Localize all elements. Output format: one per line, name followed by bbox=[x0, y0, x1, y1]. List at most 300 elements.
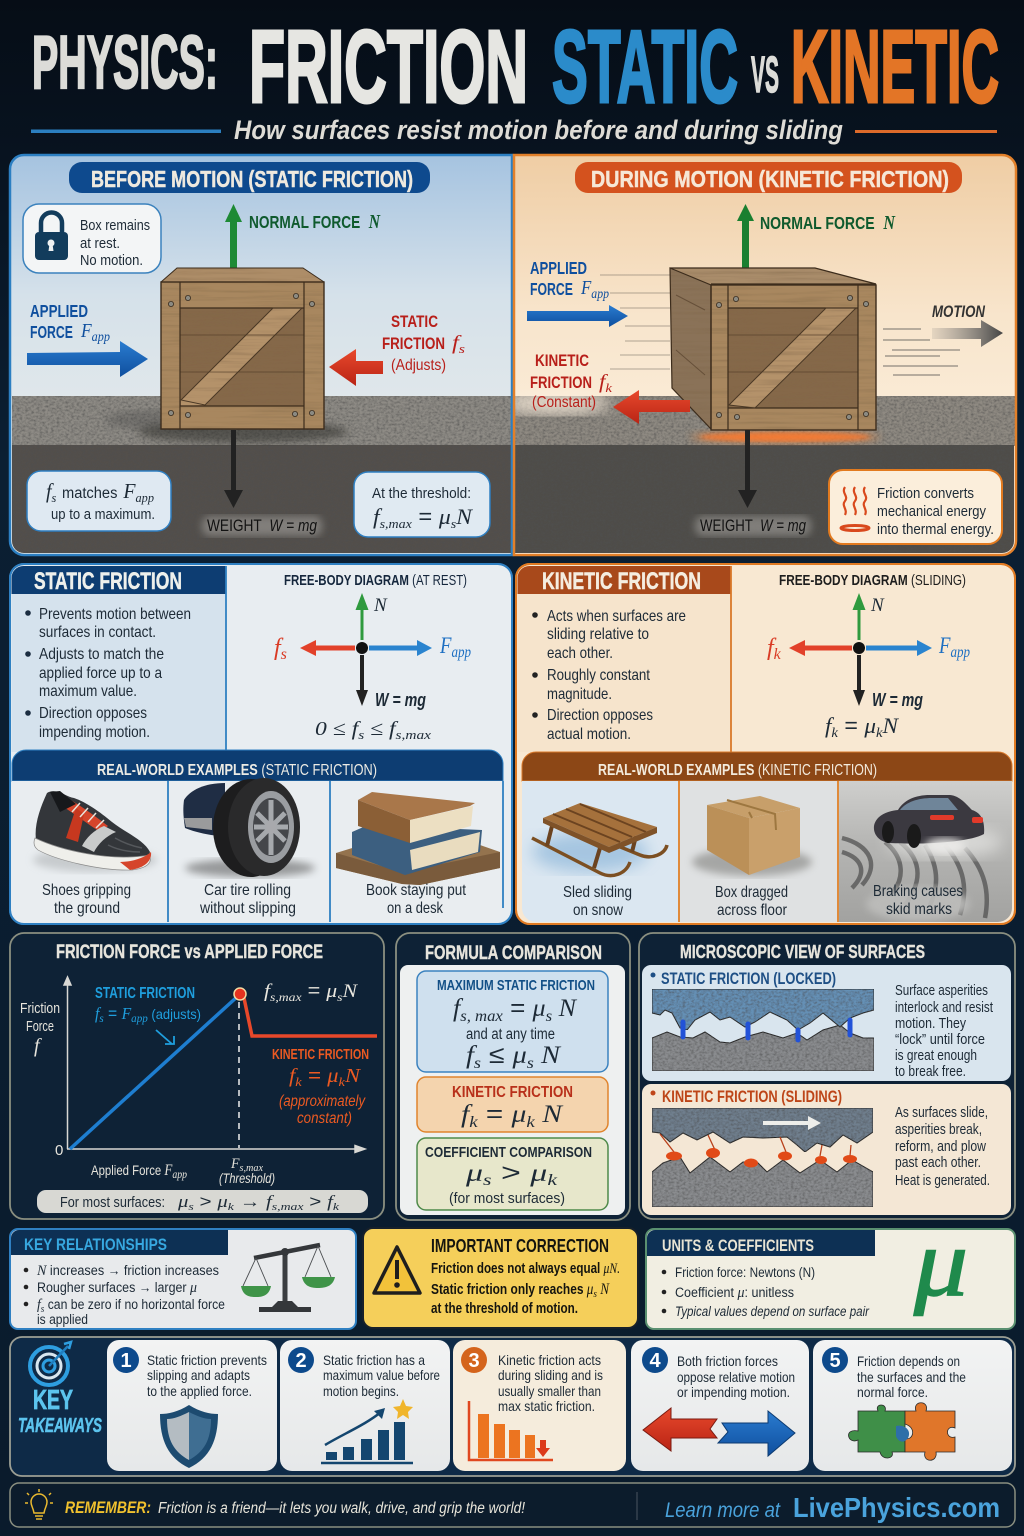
formula: coefficient comparison bbox=[417, 1138, 608, 1210]
panel: units and coefficients: Friction force: Newtons (N) bbox=[675, 1265, 815, 1280]
takeaway card 5: normal force. bbox=[857, 1384, 928, 1400]
heading: before motion bbox=[69, 162, 430, 193]
icon: shield bbox=[160, 1405, 218, 1468]
examples: static friction: Shoes gripping bbox=[42, 882, 131, 899]
illustration: sliding asperities bbox=[652, 1108, 873, 1207]
formula: kinetic friction: k bbox=[526, 1114, 536, 1131]
callout: at the threshold: = bbox=[412, 504, 439, 529]
text column: static friction: Adjusts to match the bbox=[39, 646, 164, 663]
callout: for most surfaces: f bbox=[266, 1192, 271, 1211]
free-body diagram: sliding: app bbox=[950, 644, 970, 661]
panel: important correction: Friction does not always equal μN. bbox=[431, 1261, 620, 1277]
label: static friction: STATIC FRICTION bbox=[95, 985, 195, 1002]
examples: kinetic friction: on snow bbox=[573, 902, 623, 919]
label: fs max equation: f bbox=[264, 981, 269, 1002]
takeaway card 1: Static friction prevents bbox=[147, 1352, 267, 1368]
icon: light bulb bbox=[25, 1489, 53, 1519]
heading: before motion: BEFORE MOTION (STATIC FRICTION) bbox=[91, 166, 413, 192]
label: kinetic friction: constant) bbox=[297, 1110, 352, 1127]
heading: during motion: DURING MOTION (KINETIC FRICTION) bbox=[591, 166, 949, 192]
panel: key relationships: can be zero if no horizontal force bbox=[44, 1297, 225, 1312]
formula: maximum static friction: f bbox=[466, 1042, 473, 1069]
sub-panel: static friction locked: is great enough bbox=[895, 1048, 977, 1064]
arrow: applied force bbox=[527, 305, 628, 327]
callout: at the threshold: s,max bbox=[380, 516, 412, 531]
label: applied force: app bbox=[591, 287, 609, 302]
free-body diagram: sliding: N bbox=[881, 713, 899, 738]
label: applied force: F bbox=[581, 277, 593, 299]
text column: kinetic friction: magnitude. bbox=[547, 686, 612, 703]
callout: for most surfaces bbox=[37, 1190, 368, 1213]
takeaway card 4: oppose relative motion bbox=[677, 1369, 795, 1385]
label: applied force bbox=[530, 258, 609, 302]
callout: for most surfaces: k bbox=[333, 1201, 340, 1213]
icon: decreasing bars bbox=[469, 1401, 553, 1460]
takeaway card 1 bbox=[107, 1340, 277, 1471]
formula: maximum static friction: s bbox=[474, 1055, 481, 1072]
callout: box remains at rest: Box remains bbox=[80, 218, 150, 234]
formula: coefficient comparison: > bbox=[492, 1159, 530, 1187]
icon: mu symbol: μ bbox=[913, 1209, 968, 1316]
text column: static friction: maximum value. bbox=[39, 683, 137, 700]
callout: for most surfaces: k bbox=[228, 1201, 235, 1213]
label: applied force: APPLIED bbox=[30, 301, 88, 321]
heading: key takeaways: KEY bbox=[33, 1384, 73, 1415]
free-body diagram: at rest: F bbox=[440, 633, 454, 658]
icon: warning triangle bbox=[374, 1247, 420, 1293]
free-body diagram: sliding: f bbox=[767, 635, 774, 661]
arrow: weight bbox=[224, 430, 243, 508]
formula: coefficient comparison: (for most surfaces) bbox=[449, 1190, 565, 1207]
formula: coefficient comparison: k bbox=[547, 1172, 558, 1189]
speed lines: left bbox=[600, 275, 670, 397]
free-body diagram: sliding: W = mg bbox=[872, 690, 923, 710]
icon: padlock bbox=[35, 213, 68, 260]
takeaway card 3: Kinetic friction acts bbox=[498, 1352, 601, 1368]
label: x axis: app bbox=[172, 1167, 187, 1181]
examples: kinetic friction bbox=[522, 752, 1012, 922]
free-body diagram: sliding: = bbox=[838, 713, 864, 738]
label: kinetic friction: f bbox=[289, 1065, 295, 1087]
formula: maximum static friction: = bbox=[503, 994, 533, 1022]
formula: maximum static friction: s bbox=[527, 1055, 534, 1072]
text column: kinetic friction: Direction opposes bbox=[547, 707, 653, 724]
takeaway card 2: Static friction has a bbox=[323, 1352, 425, 1368]
heading: chart: FRICTION FORCE vs APPLIED FORCE bbox=[56, 941, 323, 963]
formula: maximum static friction: N bbox=[552, 995, 577, 1022]
callout: at the threshold: s bbox=[451, 516, 456, 531]
takeaway card 5: 5 bbox=[829, 1350, 841, 1372]
formula: maximum static friction: ≤ bbox=[481, 1041, 512, 1069]
text column: static friction: Direction opposes bbox=[39, 705, 147, 722]
formula: maximum static friction: f bbox=[453, 995, 460, 1022]
heading: microscopic view: MICROSCOPIC VIEW OF SURFACES bbox=[680, 941, 925, 962]
icon: heat bbox=[841, 487, 869, 530]
free-body diagram: sliding: N bbox=[870, 595, 885, 616]
free-body diagram: at rest: s,max bbox=[396, 727, 431, 742]
label: x axis: Applied Force F bbox=[91, 1162, 177, 1179]
text column: kinetic friction: KINETIC FRICTION bbox=[542, 568, 701, 595]
takeaway card 5 bbox=[813, 1340, 1012, 1471]
callout: box remains at rest: at rest. bbox=[80, 236, 120, 252]
illustration: locked asperities bbox=[652, 989, 874, 1071]
takeaway card 2: motion begins. bbox=[323, 1383, 399, 1399]
example: car braking bbox=[842, 795, 1003, 921]
sub-panel: kinetic friction sliding: reform, and plow bbox=[895, 1139, 986, 1155]
arrow: applied force bbox=[27, 341, 148, 377]
callout: for most surfaces: f bbox=[327, 1192, 332, 1211]
label: static friction bbox=[382, 312, 465, 374]
callout: for most surfaces: s,max bbox=[272, 1201, 304, 1213]
arrow: static friction bbox=[329, 349, 383, 386]
text: remember: Friction is a friend—it lets you walk, drive, and grip the world! bbox=[158, 1500, 526, 1517]
label: kinetic friction: FRICTION bbox=[530, 373, 592, 392]
label: y axis: 0 bbox=[55, 1142, 63, 1159]
example: car tire bbox=[183, 778, 315, 877]
heading: key takeaways: TAKEAWAYS bbox=[18, 1415, 102, 1437]
text column: kinetic friction: actual motion. bbox=[547, 726, 631, 743]
ground surface bbox=[500, 392, 1015, 553]
free-body diagram: sliding: F bbox=[939, 633, 953, 658]
heading: formula comparison: FORMULA COMPARISON bbox=[425, 942, 602, 964]
callout: at the threshold: f bbox=[373, 504, 379, 529]
label: kinetic friction: (Constant) bbox=[532, 394, 596, 411]
formula: maximum static friction: N bbox=[534, 1042, 561, 1069]
sub-panel: kinetic friction sliding: asperities break, bbox=[895, 1122, 982, 1138]
callout: friction converts energy: into thermal energy. bbox=[877, 521, 994, 538]
examples: static friction: Book staying put bbox=[366, 882, 466, 899]
free-body diagram: at rest: 0 ≤ f bbox=[315, 718, 352, 740]
formula: coefficient comparison: μ bbox=[466, 1160, 479, 1187]
label: applied force: F bbox=[81, 320, 93, 342]
formula: kinetic friction: KINETIC FRICTION bbox=[452, 1084, 573, 1101]
subtitle: How surfaces resist motion before and during sliding bbox=[234, 115, 843, 145]
examples: static friction bbox=[12, 750, 503, 922]
callout: fs matches Fapp: f bbox=[46, 479, 55, 503]
label: kinetic friction: k bbox=[339, 1074, 345, 1089]
text column: kinetic friction: Acts when surfaces are bbox=[547, 608, 686, 625]
panel: key relationships: s bbox=[41, 1304, 44, 1315]
takeaway card 4: 4 bbox=[649, 1350, 661, 1372]
sub-panel: static friction locked: motion. They bbox=[895, 1016, 967, 1032]
free-body diagram: at rest: ≤ f bbox=[364, 718, 398, 740]
panel: units and coefficients bbox=[646, 1209, 1015, 1329]
label: y axis bbox=[20, 1001, 63, 1159]
takeaway card 4: or impending motion. bbox=[677, 1384, 790, 1400]
label: normal force: NORMAL FORCE N bbox=[249, 211, 381, 233]
label: threshold: (Threshold) bbox=[219, 1170, 275, 1186]
panel: important correction: IMPORTANT CORRECTION bbox=[431, 1236, 609, 1256]
line: kinetic friction bbox=[244, 998, 377, 1036]
sub-panel: static friction locked: interlock and resist bbox=[895, 1000, 993, 1016]
text column: static friction: surfaces in contact. bbox=[39, 624, 156, 641]
sub-panel: static friction locked: Surface asperities bbox=[895, 983, 988, 999]
takeaway card 1: to the applied force. bbox=[147, 1383, 252, 1399]
takeaway card 3: usually smaller than bbox=[498, 1383, 601, 1399]
threshold dashes bbox=[238, 1002, 240, 1148]
takeaway card 5: Friction depends on bbox=[857, 1353, 960, 1369]
text: learn more: LivePhysics.com bbox=[793, 1492, 1000, 1523]
callout: at the threshold: At the threshold: bbox=[372, 485, 471, 502]
label: static friction: s bbox=[99, 1011, 104, 1025]
callout: for most surfaces: s bbox=[188, 1201, 194, 1213]
panel: important correction: Static friction only reaches μ bbox=[431, 1281, 616, 1298]
label: static friction: s bbox=[459, 341, 465, 356]
sub-panel: static friction locked bbox=[642, 965, 1011, 1081]
callout: fs matches Fapp: app bbox=[136, 490, 154, 505]
title bbox=[32, 9, 999, 124]
text column: static friction: STATIC FRICTION bbox=[34, 568, 182, 595]
label: kinetic friction: k bbox=[605, 380, 612, 395]
line: static friction bbox=[70, 996, 238, 1149]
callout: friction converts energy bbox=[829, 470, 1002, 544]
formula: coefficient comparison: μ bbox=[530, 1160, 543, 1187]
free-body diagram: sliding: k bbox=[774, 646, 782, 663]
panel: friction force vs applied force chart bbox=[10, 933, 384, 1219]
takeaway card 1: slipping and adapts bbox=[147, 1367, 250, 1383]
takeaway card 3: max static friction. bbox=[498, 1398, 595, 1414]
label: kinetic friction: k bbox=[295, 1074, 302, 1089]
example: box dragged bbox=[692, 796, 812, 876]
examples: kinetic friction: across floor bbox=[717, 902, 788, 919]
text: remember bbox=[65, 1498, 526, 1517]
label: kinetic friction: (approximately bbox=[279, 1093, 366, 1110]
text column: static friction: Prevents motion between bbox=[39, 606, 191, 623]
callout: box remains at rest bbox=[23, 204, 161, 273]
callout: at the threshold: μ bbox=[439, 504, 450, 529]
formula: kinetic friction: = bbox=[478, 1100, 511, 1128]
free-body diagram: sliding: μ bbox=[864, 713, 875, 738]
panel: key takeaways bbox=[10, 1337, 1015, 1476]
label: kinetic friction: KINETIC bbox=[535, 351, 589, 370]
label: kinetic friction: μ bbox=[326, 1065, 339, 1087]
examples: static friction: REAL-WORLD EXAMPLES (STATIC FRICTION) bbox=[97, 762, 377, 779]
examples: kinetic friction: REAL-WORLD EXAMPLES (KINETIC FRICTION) bbox=[598, 762, 877, 779]
callout: box remains at rest: No motion. bbox=[80, 253, 143, 269]
callout: at the threshold: N bbox=[455, 504, 473, 529]
examples: static friction: without slipping bbox=[199, 900, 296, 917]
takeaway card 3: 3 bbox=[468, 1350, 480, 1372]
label: kinetic friction: f bbox=[599, 371, 605, 393]
crate bbox=[670, 268, 880, 444]
label: weight: WEIGHT W = mg bbox=[207, 516, 317, 535]
text: remember: REMEMBER: bbox=[65, 1498, 151, 1517]
panel: microscopic view of surfaces bbox=[639, 933, 1015, 1219]
examples: kinetic friction: skid marks bbox=[886, 901, 952, 918]
callout: fs matches Fapp: s bbox=[52, 490, 56, 505]
example: sled bbox=[532, 803, 667, 876]
label: threshold: F bbox=[231, 1156, 240, 1172]
sub-panel: kinetic friction sliding: As surfaces slide, bbox=[895, 1105, 988, 1121]
title: VS bbox=[751, 46, 779, 103]
formula: kinetic friction: k bbox=[469, 1114, 479, 1131]
example: shoe bbox=[33, 791, 157, 872]
arrow: normal force bbox=[225, 204, 242, 268]
title word: static: STATIC bbox=[552, 9, 738, 124]
takeaway card 3 bbox=[453, 1340, 626, 1471]
panel: key relationships: is applied bbox=[37, 1312, 88, 1327]
label: kinetic friction bbox=[530, 351, 612, 411]
icon: balance scale bbox=[241, 1245, 335, 1312]
panel: key relationships bbox=[10, 1229, 356, 1329]
callout: fs matches Fapp: matches bbox=[62, 485, 122, 502]
crate bbox=[161, 268, 324, 429]
panel: key relationships: Rougher surfaces → larger μ bbox=[37, 1280, 197, 1296]
examples: kinetic friction: Braking causes bbox=[873, 883, 963, 900]
text column: static friction bbox=[12, 566, 226, 752]
marker: maximum static friction bbox=[234, 988, 246, 1000]
label: applied force: app bbox=[92, 330, 110, 345]
label: static friction: (Adjusts) bbox=[391, 357, 446, 374]
label: threshold bbox=[219, 1156, 275, 1186]
text: learn more bbox=[665, 1492, 1000, 1523]
icon: rising bars with star bbox=[321, 1399, 413, 1463]
sub-panel: static friction locked: “lock” until force bbox=[895, 1032, 985, 1048]
text column: kinetic friction bbox=[518, 566, 731, 752]
label: static friction: FRICTION bbox=[382, 334, 445, 353]
icon: target bbox=[30, 1342, 71, 1385]
label: kinetic friction bbox=[272, 1047, 369, 1127]
callout: friction converts energy: Friction converts bbox=[877, 485, 974, 502]
sub-panel: kinetic friction sliding bbox=[642, 1084, 1011, 1215]
free-body diagram: at rest: FREE-BODY DIAGRAM (AT REST) bbox=[284, 572, 467, 589]
label: kinetic friction: N bbox=[344, 1065, 362, 1087]
example: books on desk bbox=[336, 792, 500, 885]
free-body diagram: sliding: f bbox=[825, 713, 831, 738]
formula: maximum static friction: μ bbox=[533, 995, 545, 1022]
examples: static friction: Car tire rolling bbox=[204, 882, 291, 899]
panel: important correction bbox=[363, 1228, 638, 1328]
text: learn more: Learn more at bbox=[665, 1499, 781, 1522]
callout: for most surfaces: μ bbox=[217, 1192, 226, 1211]
takeaway card 1: 1 bbox=[120, 1350, 132, 1372]
takeaway card 2: maximum value before bbox=[323, 1367, 440, 1383]
arrow: motion bbox=[883, 320, 1003, 375]
free-body diagram: at rest: N bbox=[373, 595, 388, 616]
label: fs max equation: s,max bbox=[270, 990, 302, 1004]
label: threshold: s,max bbox=[239, 1162, 263, 1174]
takeaway card 2 bbox=[280, 1340, 450, 1471]
formula: maximum static friction: and at any time bbox=[466, 1026, 555, 1043]
panel: units and coefficients: UNITS & COEFFICIENTS bbox=[662, 1237, 814, 1255]
panel: important correction: at the threshold of motion. bbox=[431, 1301, 578, 1317]
chart axes bbox=[64, 977, 365, 1152]
label: static friction: (adjusts) bbox=[148, 1006, 201, 1022]
free-body diagram: at rest: W = mg bbox=[375, 690, 426, 710]
callout: fs matches Fapp: up to a maximum. bbox=[51, 506, 155, 523]
label: y axis: Force bbox=[26, 1019, 54, 1035]
label: fs max equation: N bbox=[341, 981, 358, 1002]
takeaway card 4: Both friction forces bbox=[677, 1353, 778, 1369]
label: applied force: FORCE bbox=[530, 279, 573, 299]
formula: kinetic friction bbox=[417, 1077, 608, 1132]
callout: for most surfaces: μ bbox=[178, 1192, 186, 1211]
takeaway card 2: 2 bbox=[295, 1350, 307, 1372]
panel: before motion (static friction) bbox=[10, 155, 512, 555]
ground surface bbox=[12, 396, 512, 553]
label: kinetic friction: KINETIC FRICTION bbox=[272, 1047, 369, 1063]
examples: static friction: on a desk bbox=[387, 900, 444, 917]
icon: puzzle pieces bbox=[849, 1403, 955, 1460]
callout: fs matches Fapp: F bbox=[122, 479, 136, 503]
label: static friction: = bbox=[104, 1004, 122, 1023]
panel: important correction: s bbox=[593, 1288, 597, 1300]
text column: kinetic friction: sliding relative to bbox=[547, 626, 649, 643]
free-body diagram: sliding: k bbox=[876, 726, 883, 741]
callout: fs matches Fapp bbox=[27, 471, 171, 531]
label: fs max equation: s bbox=[337, 990, 343, 1004]
formula: maximum static friction: MAXIMUM STATIC FRICTION bbox=[437, 977, 595, 994]
panel: kinetic friction details bbox=[516, 564, 1015, 924]
label: static friction: STATIC bbox=[391, 312, 438, 331]
free-body diagram: sliding bbox=[767, 572, 970, 741]
free-body diagram: at rest: app bbox=[451, 644, 471, 661]
formula: maximum static friction: μ bbox=[512, 1042, 525, 1069]
arrow: weight bbox=[738, 430, 757, 508]
label: y axis: Friction bbox=[20, 1001, 60, 1017]
text column: static friction: applied force up to a bbox=[39, 665, 162, 682]
formula: kinetic friction: μ bbox=[511, 1101, 524, 1128]
arrow: kinetic friction bbox=[613, 390, 690, 424]
formula: coefficient comparison: COEFFICIENT COMPARISON bbox=[425, 1144, 592, 1161]
label: static friction: F bbox=[121, 1004, 132, 1023]
panel: static friction details bbox=[10, 564, 512, 924]
label: y axis: f bbox=[34, 1035, 42, 1057]
panel: units and coefficients: Typical values depend on surface pair bbox=[675, 1304, 869, 1319]
callout: for most surfaces: → bbox=[234, 1193, 266, 1211]
free-body diagram: sliding: k bbox=[831, 726, 839, 741]
label: applied force: FORCE bbox=[30, 322, 73, 342]
label: fs max equation: μ bbox=[325, 981, 337, 1002]
free-body diagram: at rest bbox=[274, 572, 471, 742]
label: kinetic friction: = bbox=[302, 1065, 327, 1087]
label: static friction: f bbox=[452, 332, 458, 354]
label: motion: MOTION bbox=[932, 302, 986, 321]
takeaway card 5: the surfaces and the bbox=[857, 1369, 966, 1385]
title word: physics: PHYSICS: bbox=[32, 20, 218, 104]
formula: maximum static friction: s bbox=[546, 1008, 552, 1025]
panel: key relationships: KEY RELATIONSHIPS bbox=[24, 1235, 167, 1254]
panel: key relationships: N increases → friction increases bbox=[36, 1263, 219, 1279]
sub-panel: static friction locked: STATIC FRICTION (LOCKED) bbox=[661, 970, 836, 988]
panel: formula comparison bbox=[396, 933, 630, 1220]
free-body diagram: at rest: s bbox=[358, 727, 364, 742]
icon: opposing arrows bbox=[643, 1408, 795, 1456]
panel: key relationships: f bbox=[37, 1297, 42, 1313]
sub-panel: static friction locked: to break free. bbox=[895, 1064, 966, 1080]
callout: friction converts energy: mechanical energy bbox=[877, 503, 986, 520]
label: static friction: app bbox=[131, 1011, 148, 1025]
panel: during motion (kinetic friction) bbox=[500, 155, 1016, 555]
label: weight: WEIGHT W = mg bbox=[700, 516, 806, 535]
sub-panel: kinetic friction sliding: Heat is generated. bbox=[895, 1173, 990, 1189]
text column: static friction: impending motion. bbox=[39, 724, 150, 741]
free-body diagram: at rest: s bbox=[281, 646, 287, 663]
examples: kinetic friction: Box dragged bbox=[715, 884, 788, 901]
arrow: normal force bbox=[737, 204, 754, 268]
examples: kinetic friction: Sled sliding bbox=[563, 884, 632, 901]
callout: for most surfaces: For most surfaces: bbox=[60, 1195, 165, 1211]
label: static friction bbox=[95, 985, 201, 1044]
panel: units and coefficients: Coefficient μ: unitless bbox=[675, 1285, 794, 1301]
free-body diagram: at rest: f bbox=[274, 635, 281, 661]
label: applied force bbox=[30, 301, 110, 345]
formula: maximum static friction: s, max bbox=[460, 1008, 503, 1025]
sub-panel: kinetic friction sliding: past each other. bbox=[895, 1155, 981, 1171]
formula: maximum static friction bbox=[417, 971, 608, 1072]
callout: at the threshold bbox=[354, 472, 490, 537]
formula: coefficient comparison: s bbox=[483, 1172, 492, 1189]
